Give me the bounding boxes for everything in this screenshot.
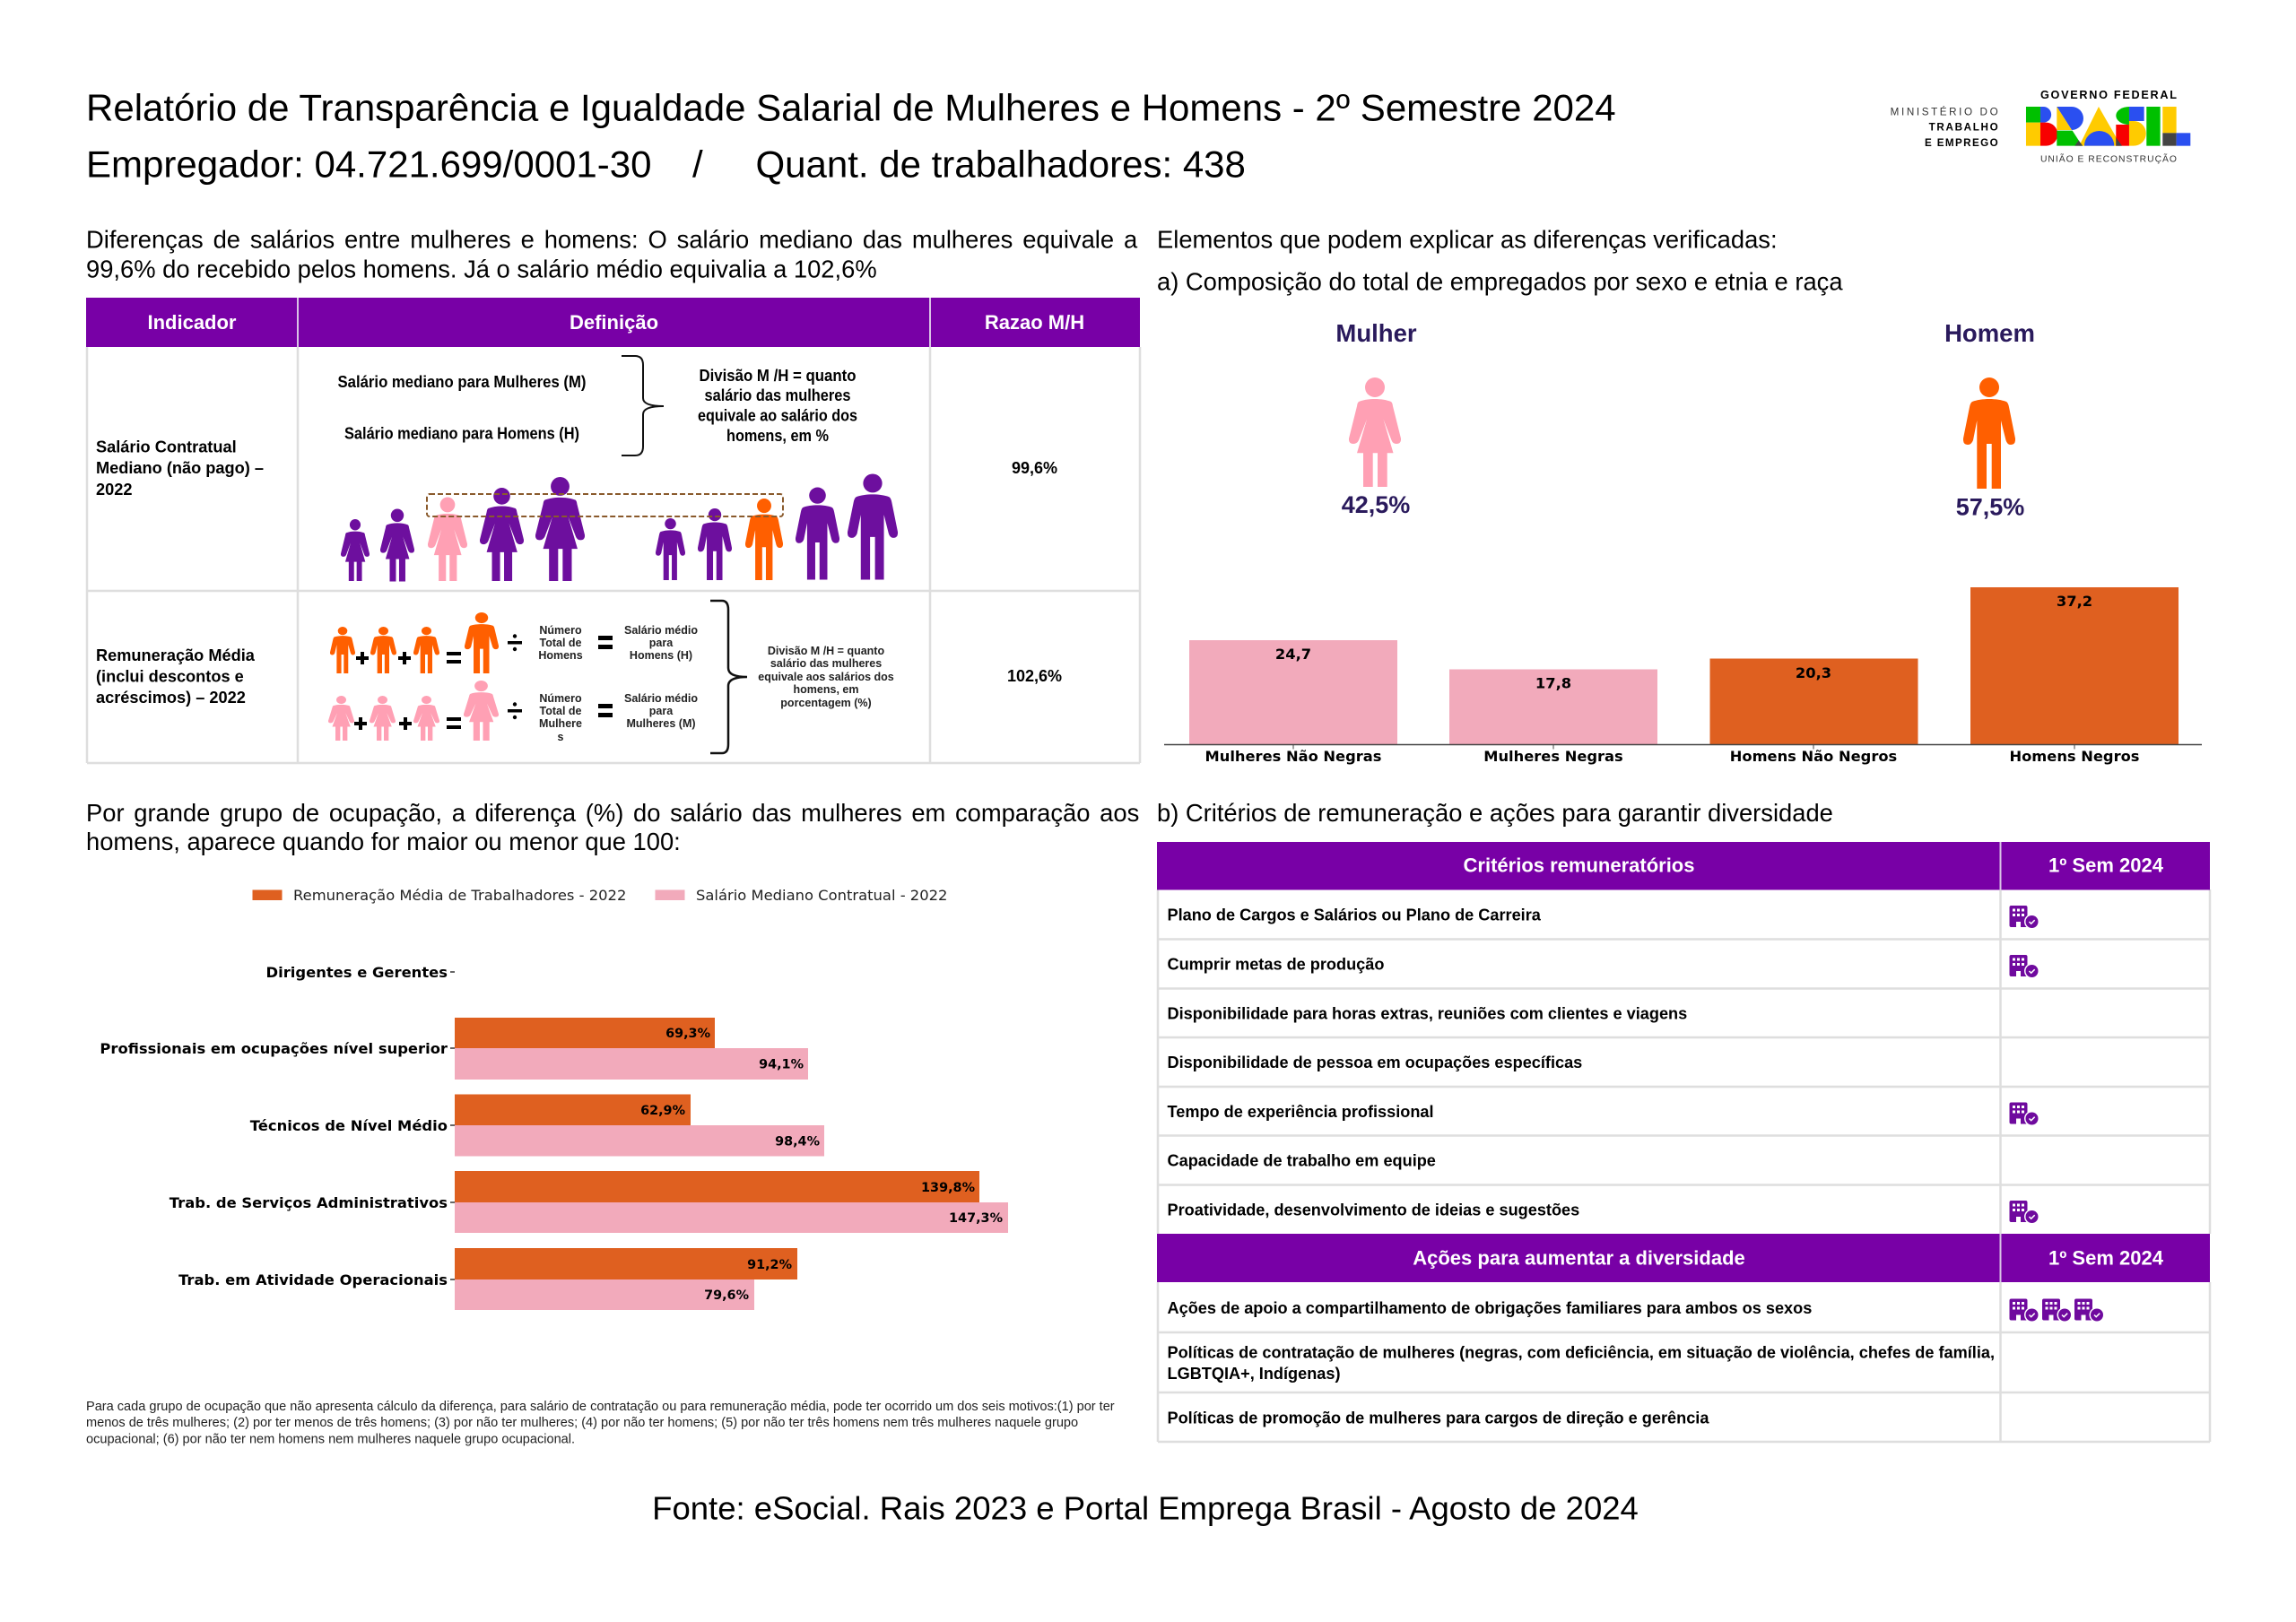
brace and ratio explanation: porcentagem (%): [780, 697, 872, 709]
formula: men mean salary: para: [649, 637, 674, 649]
footnote: ocupacional; (6) por não ter nem homens nem mulheres naquele grupo ocupacional.: [86, 1433, 575, 1447]
logo: ministério and governo federal: E EMPREGO: [1925, 137, 1998, 149]
bar values: 91,2%: [747, 1258, 792, 1272]
bar chart: employees by sex and race: 17,8: [1535, 674, 1571, 692]
criteria rows: Capacidade de trabalho em equipe: [1168, 1151, 1436, 1169]
row label: mean pay: acréscimos) – 2022: [96, 689, 246, 707]
bar values: 98,4%: [775, 1135, 820, 1149]
formula: men mean salary: Total de: [540, 637, 582, 649]
logo: ministério and governo federal: [1891, 89, 2190, 165]
bar chart: employees by sex and race: 37,2: [2057, 593, 2092, 610]
intro text: salary differences: Diferenças de salários entre mulheres e homens: O salário mediano das mulheres equivale a: [86, 226, 1138, 253]
formula: women mean salary: Total de: [540, 705, 582, 717]
formula: women mean salary: Salário médio: [624, 692, 698, 705]
row label: mean pay: [96, 646, 256, 707]
bar chart: employees by sex and race: 24,7: [1275, 646, 1311, 663]
woman share: 42,5%: [1342, 491, 1410, 518]
man share: 57,5%: [1956, 493, 2024, 520]
heading: explanatory elements: Elementos que podem explicar as diferenças verificadas:: [1157, 226, 1778, 253]
definition: median formula: Salário mediano para Homens (H): [344, 425, 579, 443]
formula: men mean salary: Número: [539, 624, 582, 637]
action rows: [1168, 1299, 1995, 1427]
bar values: 139,8%: [921, 1181, 975, 1195]
brace and ratio explanation: salário das mulheres: [770, 657, 882, 670]
formula: men mean salary: Homens: [538, 649, 583, 662]
value: mean ratio: 102,6%: [1007, 667, 1062, 685]
header: criteria: Critérios remuneratórios: [1464, 854, 1694, 877]
criteria rows: Disponibilidade de pessoa em ocupações específicas: [1168, 1054, 1582, 1071]
title: Relatório de Transparência e Igualdade Salarial de Mulheres e Homens - 2º Semestre 2024: [86, 86, 1616, 129]
logo: ministério and governo federal: MINISTÉRIO DO: [1891, 107, 1998, 118]
brace and ratio explanation: equivale aos salários dos: [758, 671, 894, 683]
intro text: salary differences: [86, 226, 1138, 283]
panel: sex composition pictogram: [1335, 319, 2035, 520]
chart legend: Salário Mediano Contratual - 2022: [696, 887, 947, 904]
category labels: [100, 964, 448, 1288]
bar values: 94,1%: [759, 1058, 804, 1072]
bars: [455, 1018, 1008, 1310]
title: Empregador: 04.721.699/0001-30: [86, 143, 651, 185]
bar values: [640, 1027, 1003, 1303]
action rows: LGBTQIA+, Indígenas): [1168, 1365, 1341, 1383]
title: [86, 86, 1616, 185]
formula: women mean salary: Mulhere: [539, 717, 582, 730]
formula: women mean salary: s: [558, 731, 564, 743]
value: median ratio: 99,6%: [1012, 459, 1057, 477]
criteria rows: Disponibilidade para horas extras, reuniões com clientes e viagens: [1168, 1004, 1687, 1022]
bar values: 79,6%: [704, 1288, 749, 1303]
man share: [1944, 319, 2035, 520]
criteria rows: [1168, 906, 1687, 1219]
bar chart: occupation groups: [100, 887, 1008, 1310]
bar values: 62,9%: [640, 1104, 685, 1118]
table header: Indicador: [147, 311, 237, 334]
woman share: Mulher: [1335, 319, 1417, 347]
table header: Definição: [570, 311, 658, 334]
formula: women mean salary: para: [649, 705, 674, 717]
formula: men mean salary: Salário médio: [624, 624, 698, 637]
heading: composition by sex and race: a) Composição do total de empregados por sexo e etnia e raça: [1157, 267, 1843, 296]
header: criteria: 1º Sem 2024: [2048, 854, 2164, 877]
row label: median salary: Mediano (não pago) –: [96, 459, 264, 477]
table header: Razao M/H: [985, 311, 1084, 334]
heading: occupation groups: [86, 799, 1139, 855]
row label: mean pay: (inclui descontos e: [96, 667, 244, 685]
brace and ratio explanation: [710, 601, 894, 753]
criteria rows: Cumprir metas de produção: [1168, 956, 1384, 974]
criteria rows: Tempo de experiência profissional: [1168, 1103, 1434, 1121]
woman share: [1335, 319, 1417, 518]
heading: occupation groups: homens, aparece quando for maior ou menor que 100:: [86, 828, 681, 855]
heading: criteria and actions: b) Critérios de remuneração e ações para garantir diversidade: [1157, 799, 1833, 827]
action rows: Políticas de contratação de mulheres (negras, com deficiência, em situação de violência, chefes de família,: [1168, 1343, 1995, 1361]
header: criteria: [1157, 842, 2210, 889]
bar chart: employees by sex and race: Mulheres Negras: [1483, 748, 1623, 765]
formula: women mean salary: Número: [539, 692, 582, 705]
formula: women mean salary: Mulheres (M): [626, 717, 696, 730]
category labels: Trab. de Serviços Administrativos: [170, 1194, 448, 1211]
panel: indicator table: [86, 298, 1140, 763]
definition: median formula: Divisão M /H = quanto: [700, 367, 856, 385]
panel: criteria and actions table: [1157, 842, 2210, 1442]
logo: ministério and governo federal: TRABALHO: [1929, 121, 1998, 133]
brace and ratio explanation: Divisão M /H = quanto: [768, 645, 884, 657]
action rows: Ações de apoio a compartilhamento de obrigações familiares para ambos os sexos: [1168, 1299, 1812, 1317]
footnote: [86, 1400, 1115, 1447]
title: /: [692, 143, 703, 185]
bar chart: employees by sex and race: [1164, 587, 2202, 765]
category labels: Trab. em Atividade Operacionais: [178, 1271, 448, 1288]
footnote: Para cada grupo de ocupação que não apresenta cálculo da diferença, para salário de contratação ou para remuneração média, pode ter ocorrido um dos seis motivos:(1) por ter: [86, 1400, 1115, 1414]
header: diversity actions: Ações para aumentar a diversidade: [1413, 1246, 1745, 1270]
action rows: Políticas de promoção de mulheres para cargos de direção e gerência: [1168, 1409, 1709, 1427]
header: diversity actions: [1157, 1234, 2210, 1282]
row label: median salary: [96, 438, 264, 499]
formula: men mean salary: Homens (H): [630, 649, 692, 662]
definition: median formula: homens, em %: [726, 427, 829, 445]
heading: occupation groups: Por grande grupo de ocupação, a diferença (%) do salário das mulheres em comparação aos: [86, 799, 1139, 827]
bar values: 69,3%: [665, 1027, 710, 1041]
formula: women mean salary: [328, 681, 698, 743]
chart legend: Remuneração Média de Trabalhadores - 2022: [293, 887, 626, 904]
category labels: Dirigentes e Gerentes: [266, 964, 448, 981]
bar chart: employees by sex and race: Mulheres Não Negras: [1205, 748, 1381, 765]
criteria rows: Plano de Cargos e Salários ou Plano de Carreira: [1168, 906, 1542, 924]
definition: median formula: [337, 356, 857, 455]
bar chart: employees by sex and race: Homens Negros: [2009, 748, 2140, 765]
table header: [147, 311, 1084, 334]
logo: ministério and governo federal: UNIÃO E RECONSTRUÇÃO: [2040, 153, 2177, 165]
bar values: 147,3%: [949, 1211, 1003, 1226]
header: diversity actions: 1º Sem 2024: [2048, 1246, 2164, 1270]
title: Quant. de trabalhadores: 438: [755, 143, 1246, 185]
source line: Fonte: eSocial. Rais 2023 e Portal Emprega Brasil - Agosto de 2024: [652, 1490, 1639, 1526]
man share: Homem: [1944, 319, 2035, 347]
brace and ratio explanation: homens, em: [794, 683, 858, 696]
icons: row of people ordered by salary: [341, 473, 898, 581]
logo: ministério and governo federal: GOVERNO FEDERAL: [2040, 89, 2177, 101]
bar chart: employees by sex and race: Homens Não Negros: [1730, 748, 1897, 765]
footnote: menos de três mulheres; (2) por ter menos de três homens; (3) por não ter mulheres; (4) por não ter homens; (5) por não ter três homens nem três mulheres naquele grupo: [86, 1416, 1078, 1430]
chart legend: [253, 887, 947, 904]
row label: median salary: 2022: [96, 481, 132, 499]
formula: men mean salary: [330, 612, 698, 673]
row label: median salary: Salário Contratual: [96, 438, 237, 455]
icons: action check marks: [2009, 1298, 2104, 1323]
definition: median formula: salário das mulheres: [705, 386, 850, 404]
criteria rows: Proatividade, desenvolvimento de ideias e sugestões: [1168, 1201, 1579, 1219]
category labels: Técnicos de Nível Médio: [250, 1117, 448, 1134]
bar chart: employees by sex and race: 20,3: [1796, 664, 1831, 681]
icons: company check marks: [2009, 906, 2039, 1225]
row label: mean pay: Remuneração Média: [96, 646, 256, 664]
definition: median formula: equivale ao salário dos: [698, 407, 857, 425]
category labels: Profissionais em ocupações nível superior: [100, 1040, 448, 1057]
intro text: salary differences: 99,6% do recebido pelos homens. Já o salário médio equivalia a 102,6%: [86, 255, 877, 283]
definition: median formula: Salário mediano para Mulheres (M): [337, 373, 587, 391]
